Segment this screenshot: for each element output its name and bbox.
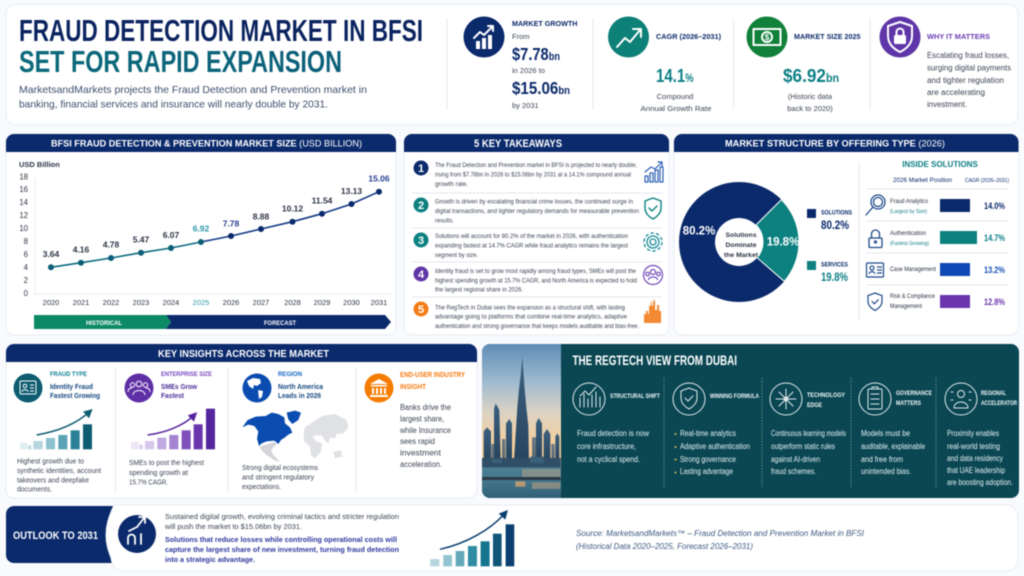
metric: why it matters <box>880 16 1011 109</box>
heading: market structure <box>674 134 1018 152</box>
panel: market size chart: USD Billion <box>19 160 60 169</box>
subtitle: banking, financial services and insurance will nearly double by 2031. <box>19 98 328 110</box>
icon: growth arrow <box>118 515 156 553</box>
legend: SERVICES <box>821 262 848 268</box>
row: risk and compliance: 12.8% <box>984 297 1005 307</box>
insight: end-user industry: investment <box>400 448 442 458</box>
line chart: 2026 <box>223 298 239 307</box>
takeaway 3: Solutions will account for 80.2% of the market in 2026, with authentication <box>435 233 628 240</box>
row: fraud analytics: (Largest by Size) <box>890 209 927 215</box>
legend <box>807 209 852 284</box>
inside solutions table: 2026 Market Position <box>893 177 953 184</box>
timeline arrow: forecast: FORECAST <box>264 320 296 327</box>
line chart: 10.12 <box>282 204 303 214</box>
insight: fraud type: synthetic identities, account <box>17 468 101 475</box>
legend: 80.2% <box>821 220 849 232</box>
column: structural shift: Fraud detection is now <box>577 429 649 438</box>
takeaway 1: The Fraud Detection and Prevention market in BFSI is projected to nearly double, <box>435 162 637 169</box>
icon: magnifier <box>866 195 885 215</box>
metric: CAGR: 14.1% <box>656 65 694 86</box>
donut chart: 19.8% <box>767 236 799 248</box>
icon: skyline <box>644 299 661 323</box>
icon: shield check <box>868 293 882 310</box>
subtitle: MarketsandMarkets projects the Fraud Detection and Prevention market in <box>19 84 367 96</box>
insight: region: REGION <box>278 371 302 378</box>
row: risk and compliance: Risk & Compliance <box>890 293 935 300</box>
metric: market size <box>746 16 860 113</box>
metric: why it matters: Escalating fraud losses, <box>927 51 1009 60</box>
icon: banknote: $ <box>765 33 770 42</box>
insight: enterprise size: ENTERPRISE SIZE <box>161 371 213 378</box>
metric: market growth: in 2026 to <box>512 66 545 75</box>
source note: Source: MarketsandMarkets™ – Fraud Detection and Prevention Market in BFSI <box>576 529 865 538</box>
row: fraud analytics: Fraud Analytics <box>890 198 928 205</box>
heading: RegTech: THE REGTECH VIEW FROM DUBAI <box>572 352 737 368</box>
heading: key takeaways: 5 KEY TAKEAWAYS <box>474 138 562 150</box>
insight: fraud type: takeovers and deepfake <box>17 477 89 484</box>
takeaway 1: rising from $7.78bn in 2026 to $15.06bn by 2031 at a 14.1% compound annual <box>435 172 631 178</box>
insight: enterprise size: Fastest <box>161 393 185 400</box>
insight: region: North America <box>278 384 323 391</box>
insight: enterprise size: spending growth at <box>129 470 188 477</box>
line chart: 16 <box>19 185 28 194</box>
metric: market growth <box>464 16 578 110</box>
metric: market size: (Historic data <box>788 92 833 101</box>
subtitle <box>19 84 367 110</box>
metric: why it matters: are accelerating <box>927 88 985 97</box>
insight: end-user industry: while Insurance <box>399 426 451 435</box>
column: winning formula: WINNING FORMULA <box>710 393 759 400</box>
takeaway 5 <box>414 299 661 330</box>
insight: enterprise size: 15.7% CAGR. <box>129 480 168 486</box>
row: risk and compliance: Management <box>890 303 922 310</box>
column: regional accelerator: that UAE leadership <box>947 466 1006 475</box>
title: FRAUD DETECTION MARKET IN BFSI <box>19 14 423 48</box>
metric: why it matters: WHY IT MATTERS <box>927 32 990 41</box>
title: SET FOR RAPID EXPANSION <box>19 45 342 79</box>
insight: region: Leads in 2026 <box>278 393 321 400</box>
map: North America highlighted <box>242 411 348 462</box>
line chart: 14 <box>19 198 29 207</box>
line chart: 2020 <box>43 298 59 307</box>
takeaway 2: 2 <box>418 200 424 212</box>
insight: end-user industry <box>364 372 465 469</box>
metric: market size: $6.92bn <box>783 65 839 86</box>
line chart: 6.07 <box>163 230 180 240</box>
panel: key takeaways <box>404 134 669 335</box>
insight: fraud type: Identity Fraud <box>50 384 93 391</box>
insight: enterprise size <box>124 371 215 486</box>
line chart: 2021 <box>73 298 89 307</box>
inside solutions table: INSIDE SOLUTIONS <box>902 160 978 169</box>
line chart: 11.54 <box>312 195 333 205</box>
heading: key insights <box>6 344 477 362</box>
column: winning formula: Adaptive authentication <box>680 442 750 451</box>
row: fraud analytics: 14.0% <box>984 201 1005 211</box>
column: structural shift: STRUCTURAL SHIFT <box>610 393 661 400</box>
icon: gear <box>644 233 662 251</box>
insight: fraud type: Highest growth due to <box>17 459 84 466</box>
line chart: 2023 <box>133 298 149 307</box>
line chart: 2025 <box>193 298 209 307</box>
column: technology edge: EDGE <box>807 402 822 409</box>
icon: people group <box>124 374 154 402</box>
column: regional accelerator: real-world testing <box>947 442 1000 451</box>
panel: market structure <box>674 134 1018 335</box>
metric: market size: back to 2020) <box>787 104 833 113</box>
takeaway 1: 1 <box>418 163 424 175</box>
icon: network node <box>770 383 802 415</box>
donut chart: the Market <box>724 252 759 259</box>
insight: end-user industry: largest share, <box>400 414 444 424</box>
panel: key insights <box>6 344 477 498</box>
line chart: 0 <box>24 289 29 298</box>
outlook text: Sustained digital growth, evolving criminal tactics and stricter regulation <box>165 512 399 521</box>
title <box>19 14 423 79</box>
line chart <box>19 172 391 307</box>
line chart: 4.16 <box>73 245 90 255</box>
icon: shield check <box>645 198 661 219</box>
insight: fraud type: FRAUD TYPE <box>50 371 88 378</box>
column: winning formula: Real-time analytics <box>680 429 736 438</box>
donut chart: 80.2% <box>683 226 715 238</box>
row: authentication: 14.7% <box>984 233 1005 243</box>
takeaway 4 <box>414 266 662 294</box>
line chart: 13.13 <box>341 186 362 196</box>
column: regional accelerator: REGIONAL <box>981 390 1006 397</box>
heading: key insights: KEY INSIGHTS ACROSS THE MARKET <box>158 349 329 360</box>
line chart: 8.88 <box>253 211 270 221</box>
metric: market growth: MARKET GROWTH <box>512 19 578 28</box>
icon: ID badge <box>14 374 42 402</box>
line chart: 2022 <box>103 298 119 307</box>
takeaway 2: results. <box>435 218 454 225</box>
takeaway 3: 3 <box>418 235 424 247</box>
takeaway 2 <box>414 198 661 225</box>
outlook band <box>6 505 1018 571</box>
icon: people <box>644 266 662 284</box>
metric: market growth: $15.06bn <box>512 78 570 98</box>
column: governance matters: Models must be <box>861 429 910 438</box>
insight: enterprise size: SMEs Grow <box>161 384 198 391</box>
insight: region: expectations. <box>242 484 281 491</box>
timeline arrow: forecast <box>166 315 391 329</box>
icon: rising bars <box>645 162 663 182</box>
column: governance matters: and free from <box>861 455 903 464</box>
row: case management: Case Management <box>890 266 936 273</box>
column: technology edge: outperform static rules <box>771 442 835 451</box>
metric: market growth: by 2031 <box>512 101 539 110</box>
outlook label: OUTLOOK TO 2031 <box>13 530 98 542</box>
column: governance matters: auditable, explainable <box>861 442 925 451</box>
line chart: 4.78 <box>103 240 120 250</box>
metric: CAGR: Annual Growth Rate <box>640 104 712 113</box>
line chart: 2031 <box>371 298 387 307</box>
heading: market size: BFSI FRAUD DETECTION & PREVENTION MARKET SIZE (USD BILLION) <box>51 138 362 150</box>
column: regional accelerator <box>945 383 1017 487</box>
header panel <box>6 4 1018 124</box>
column: regional accelerator: are boosting adoption. <box>947 478 1013 487</box>
column: winning formula: Strong governance <box>680 455 736 464</box>
outlook text: Solutions that reduce losses while controlling operational costs will <box>165 535 397 544</box>
icon: bank <box>364 374 394 402</box>
column: regional accelerator: Proximity enables <box>947 429 999 438</box>
icon: shield circle <box>673 383 705 415</box>
metric: CAGR: CAGR (2026–2031) <box>656 32 721 41</box>
takeaway 5: 5 <box>418 304 424 316</box>
outlook label <box>6 506 125 563</box>
legend: 19.8% <box>821 272 848 284</box>
column: winning formula <box>673 383 759 476</box>
line chart: 12 <box>19 211 28 220</box>
row: case management: 13.2% <box>984 265 1005 275</box>
takeaway 4: 4 <box>418 269 425 281</box>
column: winning formula: Lasting advantage <box>680 467 733 476</box>
line chart: 2029 <box>314 298 330 307</box>
column: technology edge: against AI-driven <box>771 455 820 464</box>
takeaway 4: highest spending growth at 15.7% CAGR, and North America is expected to hold <box>435 277 637 284</box>
outlook text <box>164 512 399 564</box>
row: case management <box>866 263 1005 277</box>
row: risk and compliance <box>868 293 1005 310</box>
source note: (Historical Data 2020–2025, Forecast 2026–2031) <box>576 542 753 551</box>
takeaway 3: segment by size. <box>435 252 478 259</box>
insight: region <box>242 371 348 491</box>
photo: Dubai skyline <box>482 344 561 498</box>
takeaway 3 <box>414 232 662 259</box>
metric: market growth: $7.78bn <box>512 44 560 64</box>
timeline arrow: historical: HISTORICAL <box>86 320 122 327</box>
timeline arrow: historical <box>34 315 171 329</box>
metric: CAGR: Compound <box>657 92 693 101</box>
takeaway 2: digital transactions, and tighter regulatory demands for measurable prevention <box>435 208 639 215</box>
metric: CAGR <box>608 16 721 113</box>
insight: end-user industry: sees rapid <box>400 437 435 446</box>
column: regional accelerator: and data residency <box>947 454 1003 463</box>
takeaway 1: growth rate. <box>435 181 468 188</box>
takeaway 2: Growth is driven by escalating financial crime losses, the continued surge in <box>435 199 633 206</box>
row: authentication <box>869 230 1005 248</box>
insight: fraud type: Fastest Growing <box>50 393 100 400</box>
source note <box>576 529 865 551</box>
donut chart <box>679 182 799 302</box>
line chart: 2028 <box>284 298 301 307</box>
column: governance matters: GOVERNANCE <box>896 390 932 397</box>
donut chart: Dominate <box>726 242 757 249</box>
line chart: 6.92 <box>193 223 210 233</box>
outlook text: will push the market to $15.06bn by 2031. <box>164 522 302 531</box>
line chart: 15.06 <box>368 174 390 184</box>
metric: market growth: From <box>512 32 530 41</box>
insight: end-user industry: END-USER INDUSTRY <box>400 372 465 379</box>
outlook text: into a strategic advantage. <box>165 555 255 564</box>
line chart: 3.64 <box>43 249 60 259</box>
takeaway 3: expanding fastest at 14.7% CAGR while fraud analytics remains the largest <box>435 242 628 249</box>
takeaway 5: authentication and strong governance that keeps models auditable and bias-free. <box>435 323 639 330</box>
icon: globe <box>242 374 272 402</box>
insight: end-user industry: Banks drive the <box>400 403 452 412</box>
heading: key takeaways <box>404 134 669 152</box>
insight: end-user industry: acceleration. <box>400 460 442 469</box>
takeaway 1 <box>414 160 663 188</box>
insight: region: and stringent regulatory <box>242 474 314 482</box>
icon: person network <box>945 383 977 415</box>
heading: market size <box>6 134 396 152</box>
metric: why it matters: surging digital payments <box>927 64 1011 72</box>
icon: clipboard <box>859 383 891 415</box>
column: governance matters: MATTERS <box>896 400 921 407</box>
panel: RegTech view from Dubai <box>482 344 1019 498</box>
icon: ID card <box>866 263 884 277</box>
panel: market size chart <box>6 134 396 335</box>
line chart: 5.47 <box>133 235 150 245</box>
line chart: 2024 <box>163 298 179 307</box>
line chart: 8 <box>24 237 28 246</box>
line chart: 18 <box>19 172 28 182</box>
growth bars graphic <box>430 513 514 566</box>
column: technology edge: TECHNOLOGY <box>807 392 845 399</box>
insight: region: Strong digital ecosystems <box>242 465 318 472</box>
row: fraud analytics <box>866 195 1005 215</box>
line chart: 2027 <box>253 298 269 307</box>
column: technology edge: fraud schemes. <box>771 467 816 476</box>
takeaway 4: the largest regional share in 2026. <box>435 287 523 294</box>
line chart: 10 <box>19 224 29 233</box>
takeaway 4: Identity fraud is set to grow most rapidly among fraud types, SMEs will post the <box>435 268 636 275</box>
column: technology edge <box>770 383 846 476</box>
line chart: 4 <box>24 263 29 272</box>
metric: why it matters: investment. <box>927 100 967 109</box>
outlook text: capture the largest share of new investment, turning fraud detection <box>165 545 399 554</box>
icon: padlock <box>869 230 882 248</box>
row: authentication: (Fastest Growing) <box>890 241 929 247</box>
metric: why it matters: and tighter regulation <box>927 76 1004 85</box>
inside solutions table <box>866 160 1009 310</box>
row: authentication: Authentication <box>890 230 927 237</box>
column: structural shift <box>573 383 661 464</box>
line chart: 6 <box>24 250 28 259</box>
metric: market size: MARKET SIZE 2025 <box>794 32 860 41</box>
legend: SOLUTIONS <box>821 210 852 216</box>
line chart: 7.78 <box>223 219 240 229</box>
takeaway 5: advantage going to platforms that combine real-time analytics, adaptive <box>435 314 627 321</box>
column: technology edge: Continuous learning models <box>771 429 846 438</box>
icon: trend arrow <box>608 16 649 58</box>
icon: bar trend circle <box>573 383 605 415</box>
bar graphic: teal <box>20 412 92 449</box>
takeaway 5: The RegTech in Dubai sees the expansion as a structural shift, with lasting <box>435 304 625 311</box>
insight: end-user industry: INSIGHT <box>400 384 427 391</box>
donut chart: Solutions <box>726 232 757 239</box>
insight: fraud type <box>14 371 101 494</box>
column: structural shift: core infrastructure, <box>577 442 636 451</box>
insight: fraud type: documents. <box>17 487 52 494</box>
line chart: 2 <box>24 276 28 285</box>
bar graphic: purple <box>131 409 215 449</box>
icon: shield lock <box>880 16 920 58</box>
line chart: 2030 <box>343 298 360 307</box>
inside solutions table: CAGR (2026–2031) <box>965 178 1009 184</box>
column: governance matters: unintended bias. <box>861 467 911 476</box>
icon: growth chart <box>464 16 504 58</box>
column: governance matters <box>859 383 932 476</box>
heading: market structure: MARKET STRUCTURE BY OFFERING TYPE (2026) <box>725 138 945 150</box>
column: structural shift: not a cyclical spend. <box>577 455 640 464</box>
insight: enterprise size: SMEs to post the highest <box>129 460 204 467</box>
